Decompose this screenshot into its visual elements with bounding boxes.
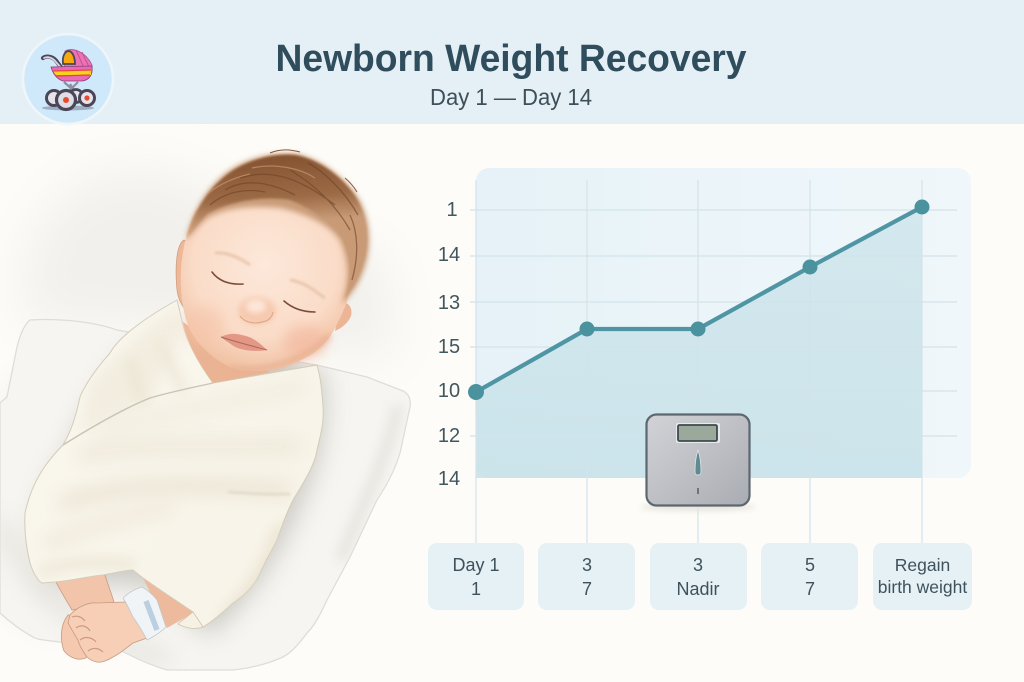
soft cheek shading <box>185 305 225 345</box>
subtitle: Day 1 — Day 14 <box>430 84 592 110</box>
baby head <box>176 150 369 371</box>
label: day 1: 1 <box>471 579 481 599</box>
illustration: sleeping swaddled newborn <box>0 150 410 670</box>
y-axis labels: 14 <box>438 244 460 266</box>
label: 5 / 7 <box>761 543 858 610</box>
label: 3 / 7 <box>538 543 635 610</box>
icon: digital baby scale <box>640 414 756 511</box>
neck shadow <box>183 322 270 383</box>
label: 3 / 7: 7 <box>582 579 592 599</box>
area under line <box>476 207 922 478</box>
title: Newborn Weight Recovery <box>276 38 746 80</box>
legs and foot tucked below blanket <box>55 572 195 662</box>
data line <box>476 207 922 392</box>
y-axis labels <box>438 199 460 490</box>
closed eye right <box>284 301 315 312</box>
closed eye left <box>212 272 243 284</box>
hair <box>186 150 369 305</box>
header band <box>0 0 1024 124</box>
eyebrows <box>215 253 325 298</box>
icon: hospital wristband <box>123 587 166 640</box>
label: nadir: Nadir <box>676 579 720 599</box>
nose <box>238 297 276 325</box>
timeline labels <box>428 543 972 610</box>
data points <box>468 200 930 400</box>
chart panel <box>476 168 971 478</box>
pillow under baby <box>0 308 410 670</box>
y-axis labels: 12 <box>438 425 460 447</box>
label: 5 / 7: 5 <box>805 555 815 575</box>
icon: baby pram badge <box>23 34 113 124</box>
y-axis labels: 14 <box>438 468 460 490</box>
label: 5 / 7: 7 <box>805 579 815 599</box>
y-axis labels: 15 <box>438 336 460 358</box>
y-axis labels: 1 <box>446 199 458 221</box>
y-axis labels: 13 <box>438 292 460 314</box>
label: nadir <box>650 543 747 610</box>
label: day 1: Day 1 <box>452 555 500 575</box>
left ear <box>176 240 196 308</box>
label: 3 / 7: 3 <box>582 555 592 575</box>
label: regain birth weight: Regain <box>895 555 950 575</box>
swaddle blanket <box>25 300 323 628</box>
label: nadir: 3 <box>693 555 703 575</box>
mouth <box>221 334 267 351</box>
right ear <box>335 303 351 331</box>
label: day 1 <box>428 543 524 610</box>
label: regain birth weight <box>873 543 972 610</box>
soft sheet behind baby <box>20 171 395 360</box>
face <box>181 187 353 371</box>
chart: weight recovery line chart <box>438 168 971 543</box>
label: regain birth weight: birth weight <box>878 577 967 597</box>
y-axis labels: 10 <box>438 380 460 402</box>
